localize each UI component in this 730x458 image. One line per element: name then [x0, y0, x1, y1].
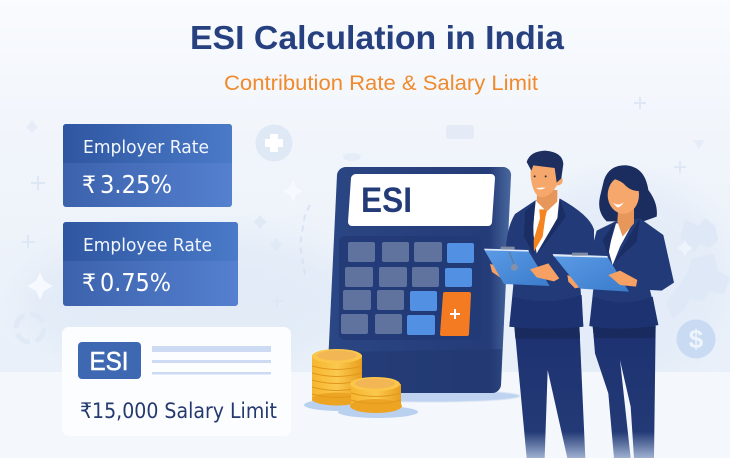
badge: ESI	[78, 342, 141, 379]
panel: employee rate: ₹	[82, 269, 96, 297]
subtitle: Contribution Rate & Salary Limit	[224, 71, 538, 95]
calculator body	[327, 167, 511, 393]
woman's neck and face	[617, 207, 634, 237]
panel: employer rate	[63, 124, 232, 207]
lapels	[524, 199, 566, 255]
woman's fringe	[608, 171, 641, 191]
panel: employer rate: Employer Rate	[83, 138, 209, 158]
icon: puzzle pieces	[666, 218, 730, 318]
hair	[527, 151, 563, 183]
calculator	[327, 167, 511, 393]
panel: employee rate: 0.75%	[100, 268, 171, 297]
woman's hands and clipboard	[567, 275, 583, 288]
panel: salary limit	[62, 327, 291, 436]
panel: employer rate: ₹	[82, 171, 96, 199]
woman in suit	[553, 165, 674, 458]
salary limit text: ₹15,000 Salary Limit	[80, 399, 277, 424]
woman's jacket	[589, 218, 674, 329]
man's hands and clipboard	[490, 264, 505, 277]
woman's back hair	[599, 165, 657, 221]
icon: dollar coin	[676, 320, 716, 358]
face details	[536, 187, 545, 190]
calculator screen: ESI	[361, 181, 412, 220]
title: ESI Calculation in India	[190, 19, 565, 56]
trousers	[514, 325, 585, 458]
woman's trousers	[593, 325, 656, 458]
man in suit	[484, 151, 594, 458]
decorative sparkles and pluses	[16, 97, 705, 342]
panel: employee rate: Employee Rate	[83, 236, 212, 256]
icon: dollar coin: $	[689, 324, 704, 354]
placeholder text lines	[152, 346, 271, 374]
woman's blouse	[608, 223, 633, 265]
panel: employer rate: 3.25%	[100, 170, 172, 199]
background decorative icons	[16, 97, 730, 358]
coins	[304, 349, 418, 418]
woman's lapels	[603, 218, 640, 263]
calculator screen	[348, 174, 495, 226]
keypad well	[339, 236, 481, 340]
orange plus key	[440, 292, 471, 336]
coin stack: right	[350, 377, 402, 413]
badge: ESI: ESI	[90, 346, 128, 376]
calculator keys	[341, 242, 474, 335]
icon: medical plus circle	[256, 124, 292, 162]
floor shadow	[340, 390, 520, 402]
neck and head	[537, 190, 557, 212]
shirt and tie	[533, 198, 559, 253]
coin stack: left	[312, 349, 362, 406]
panel: employee rate	[63, 222, 238, 306]
jacket	[504, 199, 594, 329]
